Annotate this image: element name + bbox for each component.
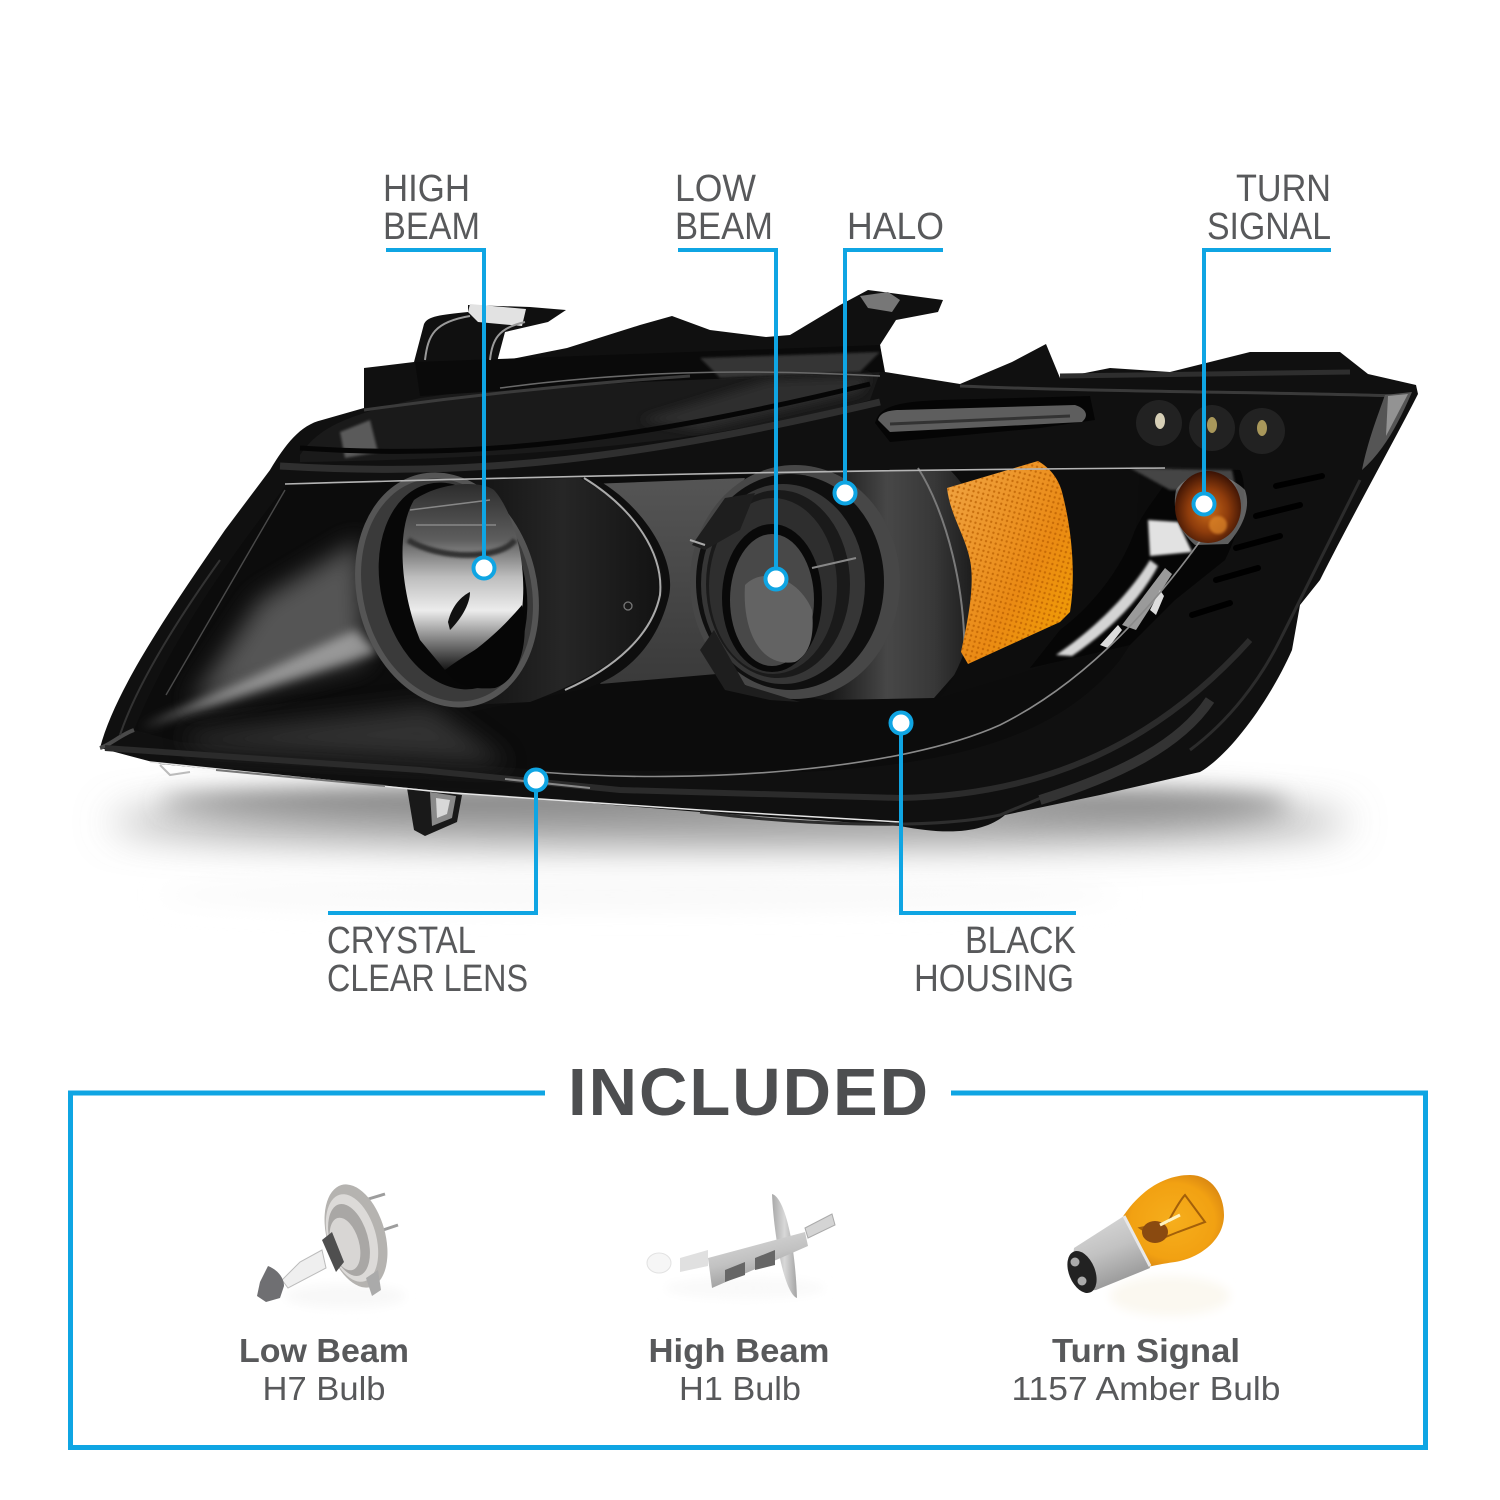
upper mounting clip right [860,292,900,312]
callout: low beam: BEAM [675,206,773,248]
high-beam barrel [440,476,670,712]
icon: H7 bulb [257,1177,405,1308]
low-beam grey barrel [760,468,1140,700]
callout: high beam: HIGH [383,168,470,210]
upper right trim [960,372,1412,750]
callout: low beam [675,168,786,590]
item: turn signal 1157 bulb: 1157 Amber Bulb [1012,1370,1280,1407]
icon: 1157 amber bulb [1062,1175,1230,1316]
label: Turn Signal [1052,1332,1240,1369]
item: high beam H1 bulb: H1 Bulb [679,1370,801,1407]
high-beam halo ring [331,453,563,727]
callout: black housing [890,712,1076,1000]
lower outer lens edge [105,640,1250,824]
callout: turn signal: SIGNAL [1207,206,1331,248]
callout: turn signal [1194,168,1331,514]
callout: high beam [383,168,494,578]
interior panel bottom arc [540,520,1215,777]
headlight silhouette [100,290,1418,831]
callout: halo: HALO [847,206,944,248]
upper right DRL bar [875,396,1095,442]
callout: black housing: BLACK [965,920,1076,962]
callout: high beam: BEAM [383,206,480,248]
lens interior panel [134,468,1177,772]
upper housing band [280,345,884,469]
upper mounting clip left [425,304,526,360]
callout: turn signal: TURN [1236,168,1331,210]
item: low beam H7 bulb [239,1177,409,1407]
ground shadow [110,790,1350,909]
item: high beam H1 bulb [647,1194,835,1407]
panel: included bulbs frame [70,1093,1426,1448]
item: low beam H7 bulb: H7 Bulb [262,1370,386,1407]
callout: halo [834,206,944,504]
left panel reflection [100,490,510,765]
chrome streak reflector [1030,468,1244,668]
amber side reflector [947,461,1073,664]
headlight product illustration [100,290,1418,836]
callout: crystal clear lens: CLEAR LENS [327,958,528,1000]
halo ring low beam [690,465,900,699]
vent slots [1192,476,1322,615]
grey area behind projectors [590,478,745,684]
callout: low beam: LOW [675,168,756,210]
callout: crystal clear lens: CRYSTAL [327,920,476,962]
amber turn signal bulb [1175,471,1247,545]
high-beam reflector [403,484,525,688]
label: High Beam [648,1332,830,1369]
callout: crystal clear lens [327,770,546,1000]
item: turn signal 1157 bulb [1012,1175,1280,1407]
crease highlight line [285,468,1165,484]
heading: included: INCLUDED [568,1055,928,1130]
lower mounting tab [407,788,462,836]
icon: H1 bulb [647,1194,835,1298]
label: Low Beam [239,1332,409,1369]
low-beam projector lens [690,493,856,702]
LED modules [1136,400,1285,454]
callout: black housing: HOUSING [914,958,1074,1000]
